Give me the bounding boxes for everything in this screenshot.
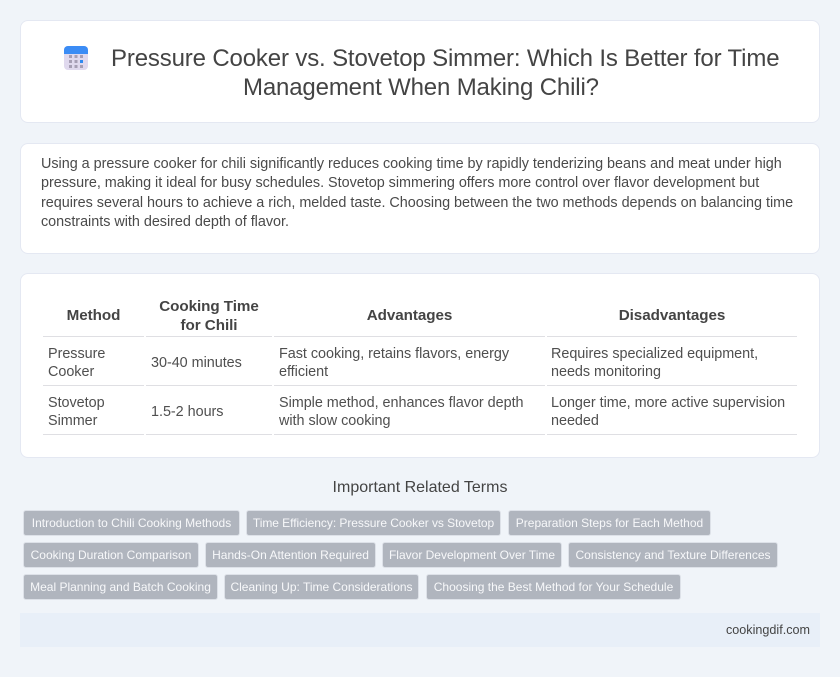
row: stovetop method — [48, 395, 105, 429]
text block: introduction: constraints with desired depth of flavor. — [41, 214, 289, 230]
panel: title card — [20, 20, 820, 123]
title: Management When Making Chili? — [243, 74, 599, 101]
footer bar — [20, 613, 820, 647]
row: stovetop method: Stovetop — [48, 395, 105, 411]
row: pressure cooker method — [48, 346, 105, 380]
tag: Meal Planning and Batch Cooking — [30, 580, 211, 594]
row: pressure cooker advantages — [279, 346, 509, 380]
tag — [23, 574, 218, 600]
heading: related terms: Important Related Terms — [333, 479, 507, 496]
tag: Introduction to Chili Cooking Methods — [32, 516, 231, 530]
row: pressure cooker advantages: Fast cooking, retains flavors, energy — [279, 346, 509, 362]
tag — [426, 574, 681, 600]
icon: calendar — [64, 46, 88, 70]
row: pressure cooker method: Cooker — [48, 364, 94, 380]
row: stovetop advantages: with slow cooking — [279, 413, 390, 429]
tag — [382, 542, 562, 568]
tag: Time Efficiency: Pressure Cooker vs Stovetop — [253, 516, 494, 530]
footer source text: cookingdif.com — [726, 623, 810, 637]
row: stovetop disadvantages: Longer time, more active supervision — [551, 395, 785, 411]
text block: introduction: Using a pressure cooker for chili significantly reduces cooking time by rapidly tenderizing beans and meat under high — [41, 156, 782, 172]
tag: Cleaning Up: Time Considerations — [230, 580, 413, 594]
title: Pressure Cooker vs. Stovetop Simmer: Which Is Better for Time — [111, 45, 779, 72]
tag: Choosing the Best Method for Your Schedule — [434, 580, 673, 594]
row: pressure cooker disadvantages: Requires specialized equipment, — [551, 346, 758, 362]
text block: introduction — [41, 156, 793, 230]
panel: introduction — [20, 143, 820, 254]
text block: introduction: requires several hours to achieve a rich, melded taste. Choosing between the two methods depends on balancing time — [41, 195, 793, 211]
table header: cooking time: Cooking Time — [159, 298, 259, 315]
row: stovetop disadvantages — [551, 395, 785, 429]
tag — [568, 542, 778, 568]
row: stovetop time: 1.5-2 hours — [151, 404, 223, 420]
tag — [246, 510, 501, 536]
row: stovetop method: Simmer — [48, 413, 97, 429]
table header: advantages: Advantages — [367, 307, 452, 324]
tag: Preparation Steps for Each Method — [516, 516, 703, 530]
text block: introduction: pressure, making it ideal for busy schedules. Stovetop simmering offers more control over flavor development but — [41, 175, 759, 191]
row: pressure cooker advantages: efficient — [279, 364, 328, 380]
tag: Flavor Development Over Time — [389, 548, 555, 562]
row: pressure cooker time: 30-40 minutes — [151, 355, 242, 371]
table header: cooking time — [159, 298, 259, 334]
tag — [508, 510, 711, 536]
row: pressure cooker disadvantages — [551, 346, 758, 380]
table header: method: Method — [67, 307, 120, 324]
title — [111, 45, 779, 101]
tag: Hands-On Attention Required — [212, 548, 369, 562]
tag: Cooking Duration Comparison — [31, 548, 191, 562]
tag — [23, 510, 240, 536]
row: stovetop advantages — [279, 395, 524, 429]
row: stovetop advantages: Simple method, enhances flavor depth — [279, 395, 524, 411]
tags: related terms — [23, 510, 778, 600]
row: pressure cooker disadvantages: needs monitoring — [551, 364, 661, 380]
row: pressure cooker method: Pressure — [48, 346, 105, 362]
table header: disadvantages: Disadvantages — [619, 307, 725, 324]
tag — [205, 542, 376, 568]
tag — [23, 542, 199, 568]
tag: Consistency and Texture Differences — [576, 548, 770, 562]
row: stovetop disadvantages: needed — [551, 413, 599, 429]
panel: comparison table — [20, 273, 820, 458]
tag — [224, 574, 419, 600]
table header: cooking time: for Chili — [181, 317, 237, 334]
